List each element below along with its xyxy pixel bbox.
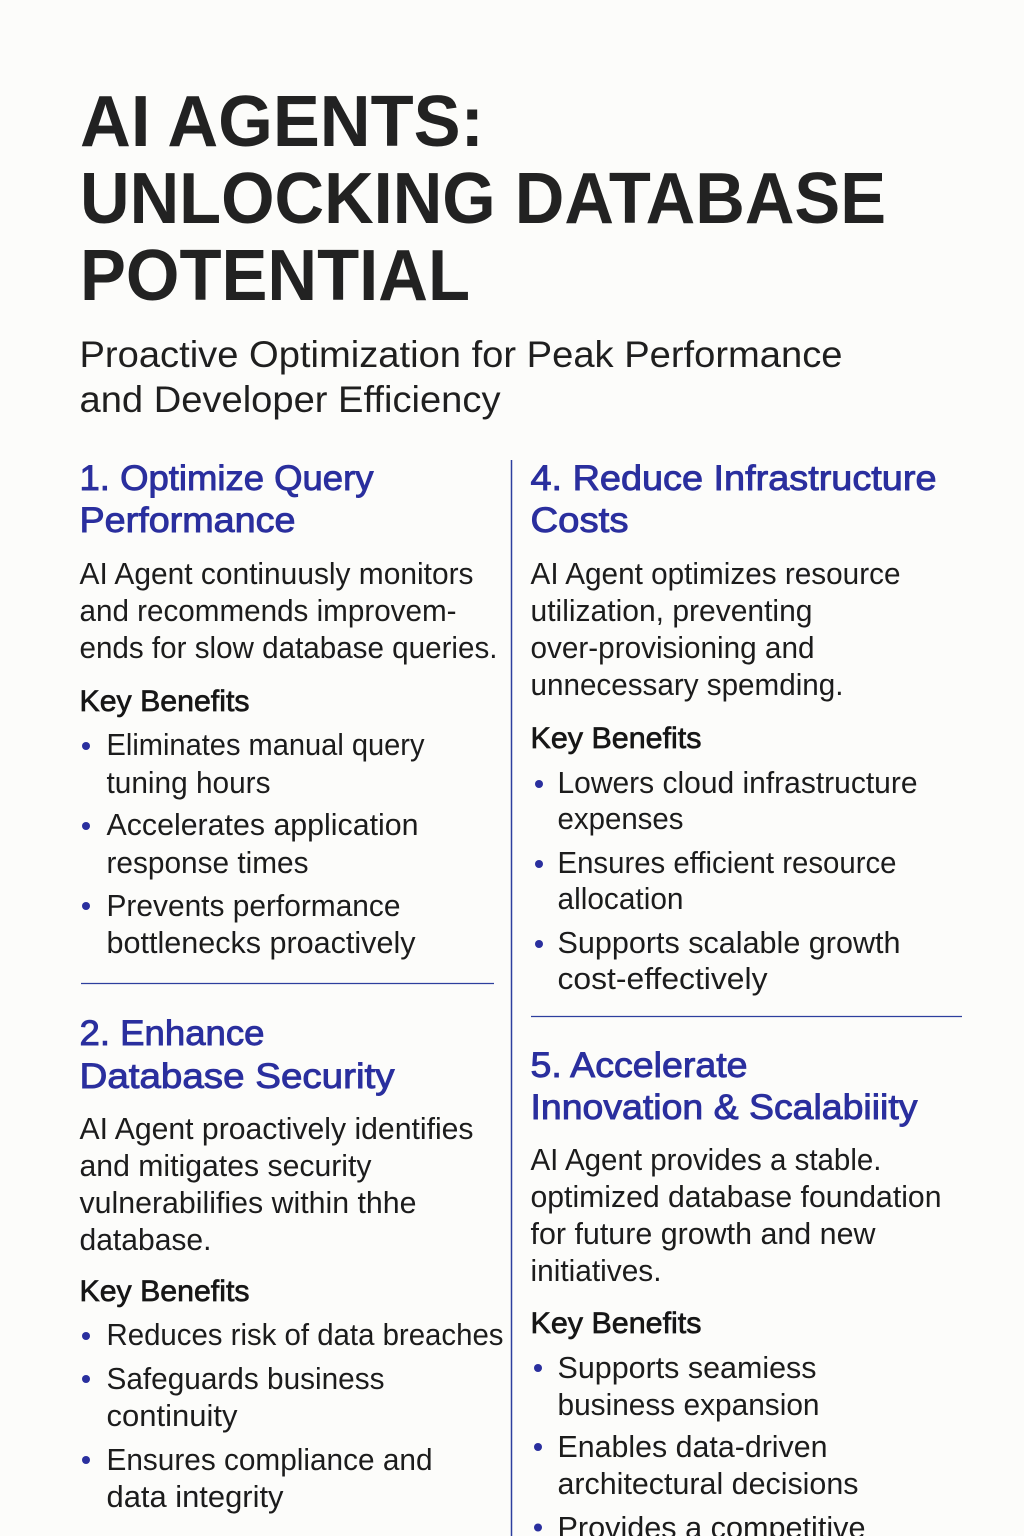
description: section 2: AI Agent proactively identifies — [80, 1112, 474, 1146]
heading: section 1: 1. Optimize Query — [80, 459, 374, 498]
title — [80, 82, 886, 316]
description: section 4 — [530, 557, 900, 702]
heading: section 2: 2. Enhance — [80, 1014, 264, 1053]
subheading: key benefits 5: Key Benefits — [530, 1307, 702, 1340]
description: section 2: database. — [80, 1223, 212, 1257]
description: section 2: vulnerabilifies within thhe — [80, 1186, 416, 1220]
bullet list: section 2: Safeguards business — [106, 1362, 384, 1396]
heading: section 4: 4. Reduce Infrastructure — [530, 459, 936, 498]
heading: section 2: Database Security — [80, 1057, 395, 1096]
bullet list: section 5 — [534, 1351, 866, 1536]
description: section 4: over-provisioning and — [530, 631, 814, 665]
bullet list: section 4: expenses — [558, 802, 684, 836]
subtitle: and Developer Efficiency — [80, 379, 501, 420]
panel: 5. accelerate innovation and scalability — [530, 1046, 942, 1536]
description: section 4: AI Agent optimizes resource — [530, 557, 900, 591]
heading: section 4: Costs — [530, 501, 628, 540]
bullet list: section 2: Ensures compliance and — [106, 1443, 432, 1477]
heading: section 4 — [530, 459, 936, 540]
description: section 1: AI Agent continuusly monitors — [80, 557, 474, 591]
subheading: key benefits 1: Key Benefits — [80, 685, 249, 718]
bullet list: section 1: bottlenecks proactively — [106, 926, 416, 960]
subtitle — [80, 334, 842, 420]
description: section 5 — [530, 1143, 942, 1288]
bullet list: section 5: Enables data-driven — [558, 1430, 828, 1464]
title: AI AGENTS: — [80, 82, 484, 162]
heading: section 1 — [80, 459, 374, 540]
bullet list: section 4 — [535, 766, 918, 996]
description: section 5: for future growth and new — [530, 1217, 876, 1251]
description: section 4: unnecessary spemding. — [530, 668, 844, 702]
description: section 2 — [80, 1112, 474, 1257]
description: section 5: initiatives. — [530, 1254, 662, 1288]
bullet list: section 5: architectural decisions — [558, 1467, 858, 1501]
bullet list: section 2 — [82, 1318, 504, 1514]
heading: section 5 — [530, 1046, 918, 1127]
title: UNLOCKING DATABASE — [80, 159, 886, 239]
title: POTENTIAL — [80, 236, 470, 316]
description: section 2: and mitigates security — [80, 1149, 372, 1183]
panel: 4. reduce infrastructure costs — [530, 459, 936, 996]
description: section 4: utilization, preventing — [530, 594, 812, 628]
subheading: key benefits 4: Key Benefits — [530, 722, 702, 755]
bullet list: section 1: tuning hours — [106, 766, 270, 800]
description: section 5: AI Agent provides a stable. — [530, 1143, 882, 1177]
bullet list: section 4: Lowers cloud infrastructure — [558, 766, 918, 800]
bullet list: section 2: Reduces risk of data breaches — [106, 1318, 504, 1352]
bullet list: section 4: Ensures efficient resource — [558, 846, 896, 880]
bullet list: section 4: cost-effectively — [558, 962, 768, 996]
heading: section 1: Performance — [80, 501, 296, 540]
bullet list: section 1 — [82, 728, 425, 960]
bullet list: section 5: business expansion — [558, 1388, 820, 1422]
subheading: key benefits 2: Key Benefits — [80, 1275, 249, 1308]
bullet list: section 1: Prevents performance — [106, 889, 400, 923]
bullet list: section 1: Accelerates application — [106, 808, 418, 842]
bullet list: section 1: Eliminates manual query — [106, 728, 425, 762]
description: section 5: optimized database foundation — [530, 1180, 942, 1214]
bullet list: section 2: data integrity — [106, 1480, 284, 1514]
panel: 2. enhance database security — [80, 1014, 504, 1514]
description: section 1 — [80, 557, 498, 665]
bullet list: section 5: Supports seamiess — [558, 1351, 816, 1385]
heading: section 2 — [80, 1014, 395, 1096]
bullet list: section 2: continuity — [106, 1399, 238, 1433]
heading: section 5: Innovation & Scalabiiity — [530, 1088, 918, 1127]
bullet list: section 1: response times — [106, 846, 308, 880]
heading: section 5: 5. Accelerate — [530, 1046, 748, 1085]
bullet list: section 4: allocation — [558, 882, 684, 916]
subtitle: Proactive Optimization for Peak Performance — [80, 334, 842, 375]
description: section 1: and recommends improvem- — [80, 594, 456, 628]
panel: 1. optimize query performance — [80, 459, 498, 960]
bullet list: section 4: Supports scalable growth — [558, 926, 900, 960]
description: section 1: ends for slow database queries. — [80, 631, 498, 665]
